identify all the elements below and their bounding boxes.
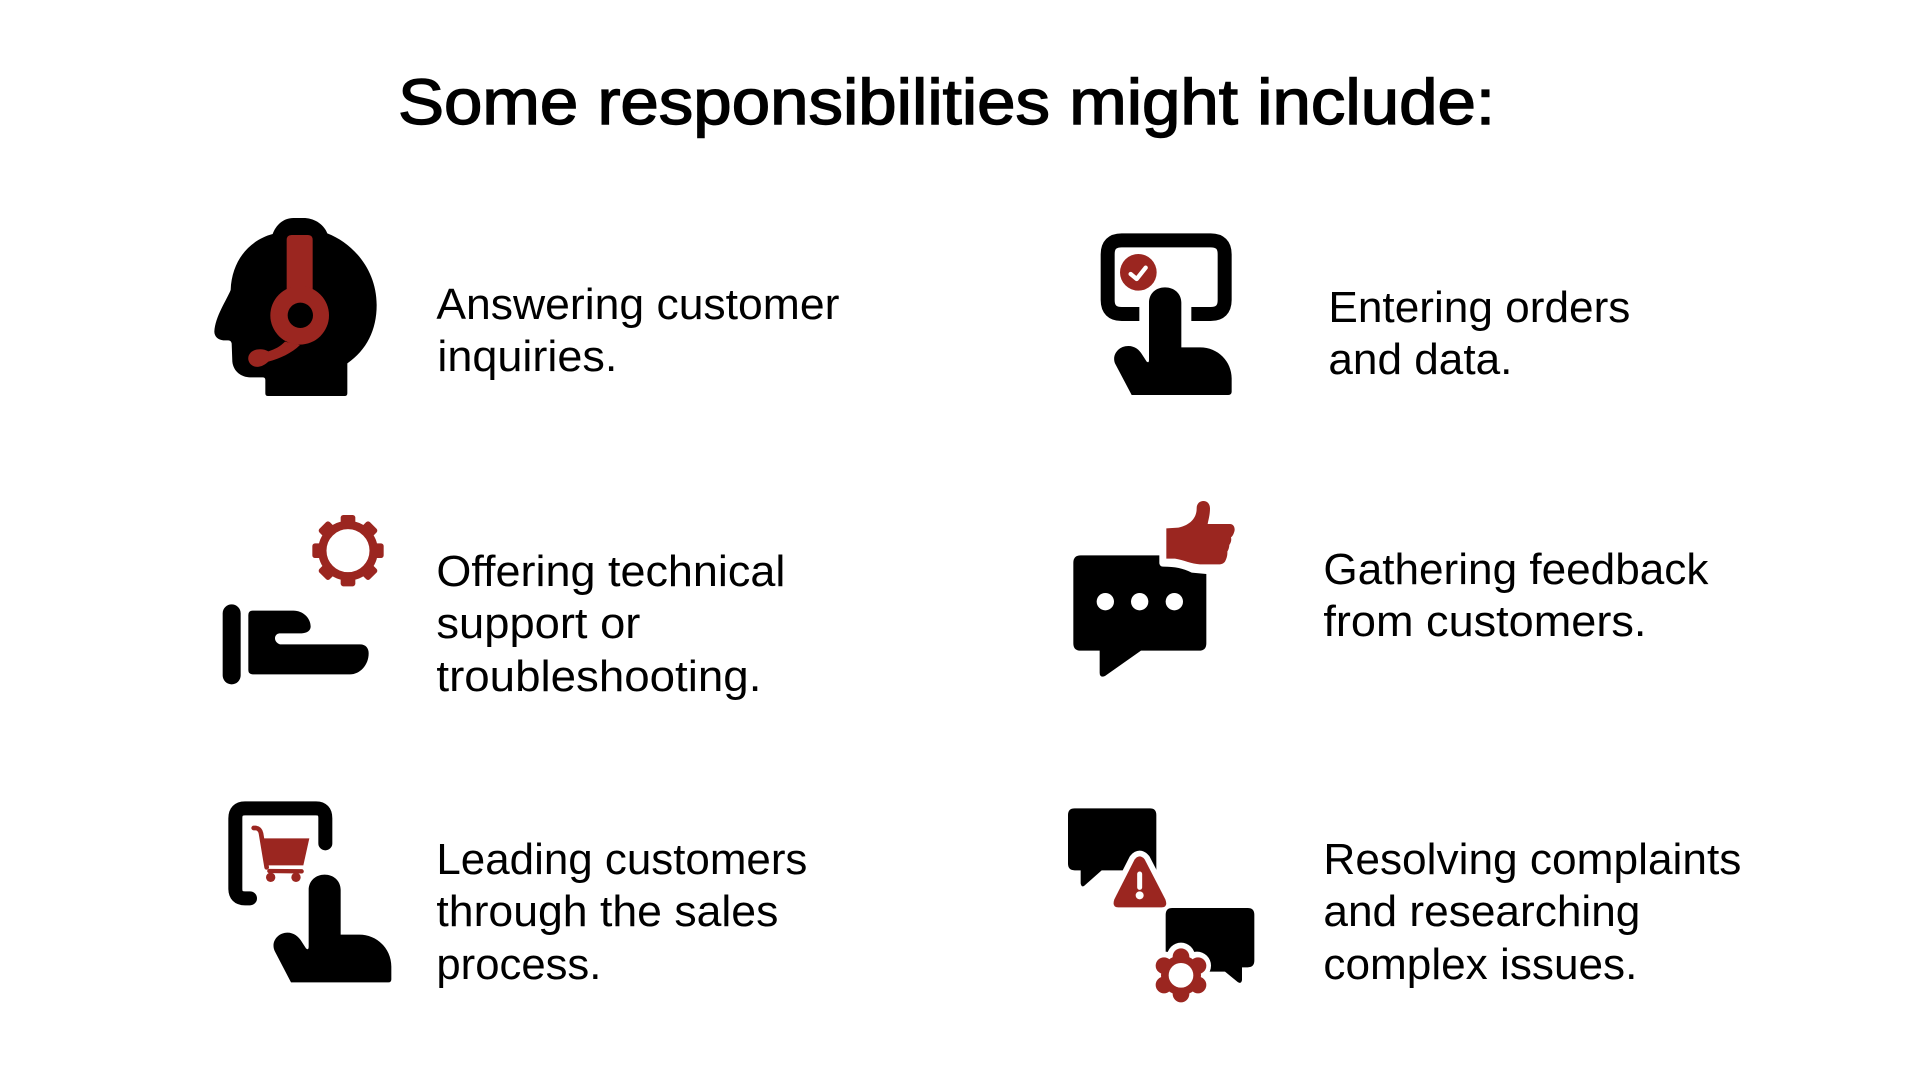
- panel: leading customers through sales: [235, 808, 807, 989]
- text: leading customers through sales: [436, 835, 807, 989]
- text: answering customer inquiries: [436, 280, 839, 381]
- text: answering customer inquiries: Answering customer: [436, 280, 839, 329]
- text: offering technical support: [436, 547, 785, 701]
- text: leading customers through sales: process.: [436, 940, 601, 989]
- text: gathering feedback: [1323, 545, 1709, 646]
- panel: gathering feedback: [1073, 501, 1709, 677]
- panel: offering technical support: [223, 515, 785, 701]
- icon: chat bubbles with warning and gear: [1068, 808, 1254, 1008]
- text: resolving complaints: and researching: [1323, 887, 1640, 936]
- text: resolving complaints: complex issues.: [1323, 940, 1637, 989]
- icon: hand holding gear: [223, 515, 384, 684]
- text: offering technical support: support or: [436, 599, 640, 648]
- icon: finger touching screen with cart: [235, 808, 391, 982]
- panel: entering orders and data: [1108, 240, 1630, 395]
- text: resolving complaints: Resolving complaints: [1323, 835, 1741, 884]
- icon: chat bubble with thumbs up: [1073, 501, 1235, 677]
- panel: resolving complaints: [1068, 808, 1741, 1008]
- text: leading customers through sales: through the sales: [436, 887, 778, 936]
- text: entering orders and data: and data.: [1328, 335, 1512, 384]
- text: offering technical support: Offering technical: [436, 547, 785, 596]
- text: gathering feedback: from customers.: [1323, 597, 1646, 646]
- icon: finger touching screen with check: [1108, 240, 1232, 395]
- panel: answering customer inquiries: [214, 218, 839, 396]
- text: offering technical support: troubleshooting.: [436, 652, 761, 701]
- text: resolving complaints: [1323, 835, 1741, 989]
- icon: head with headset: [214, 218, 377, 396]
- text: entering orders and data: [1328, 283, 1630, 384]
- text: leading customers through sales: Leading customers: [436, 835, 807, 884]
- title: Some responsibilities might include:: [398, 66, 1495, 138]
- text: gathering feedback: Gathering feedback: [1323, 545, 1709, 594]
- text: answering customer inquiries: inquiries.: [437, 332, 617, 381]
- text: entering orders and data: Entering orders: [1328, 283, 1630, 332]
